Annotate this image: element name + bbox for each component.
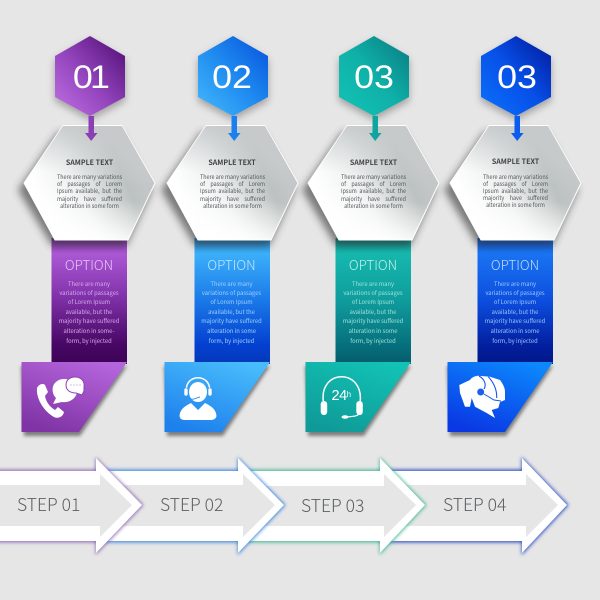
hexagon badge <box>481 36 551 120</box>
text block: There are many variations <box>341 172 406 181</box>
option text: available, but the <box>350 307 396 316</box>
fold with 24h headset icon <box>305 362 411 436</box>
icon: support agent <box>179 378 216 420</box>
icon: call centre team <box>459 376 505 418</box>
white hexagon <box>18 126 155 246</box>
text block <box>341 172 406 210</box>
text block: Ipsum available, but the <box>200 186 264 195</box>
text block: majority have suffered <box>341 194 406 203</box>
text block: There are many variations <box>57 172 122 181</box>
option text: form, by injected <box>209 336 254 345</box>
ribbon <box>52 238 127 364</box>
option text: alteration in some <box>349 326 397 335</box>
hexagon badge <box>55 36 125 120</box>
fold with phone icon <box>21 362 127 436</box>
option heading: OPTION <box>207 254 256 274</box>
text block: alteration in some form <box>344 201 403 210</box>
option text: There are many <box>210 278 253 288</box>
option text: majority have suffered <box>485 316 545 325</box>
option text: of Lorem Ipsum <box>352 297 394 306</box>
text block: alteration in some form <box>486 200 545 209</box>
option text: of Lorem Ipsum <box>494 297 536 306</box>
icon: phone and speech bubbles <box>37 377 84 418</box>
hexagon badge <box>198 36 268 120</box>
heading: sample text: SAMPLE TEXT <box>492 157 539 167</box>
option text: available, but the <box>208 307 255 316</box>
text block: majority have suffered <box>483 193 548 202</box>
text block: There are many variations <box>200 172 265 181</box>
option text: There are many <box>68 278 110 288</box>
arrow connector <box>228 116 240 141</box>
text block: alteration in some form <box>60 201 119 210</box>
hexagon badge <box>339 36 409 120</box>
option text: majority have suffered <box>201 316 262 325</box>
text block: Ipsum available, but the <box>341 186 406 195</box>
panel: column 1 <box>14 36 156 438</box>
option text <box>343 278 403 345</box>
option text: form, by injected <box>492 336 538 345</box>
option text: available, but the <box>492 307 538 316</box>
option text: There are many <box>352 278 394 288</box>
heading: sample text: SAMPLE TEXT <box>350 158 397 168</box>
number: 01 <box>72 59 107 95</box>
ribbon <box>194 238 270 364</box>
option text: There are many <box>494 278 536 288</box>
option heading: OPTION <box>349 254 397 274</box>
text block: Ipsum available, but the <box>57 186 122 195</box>
text block: majority have suffered <box>57 194 122 203</box>
number: 02 <box>212 59 251 95</box>
number: 03 <box>354 59 394 95</box>
panel: column 4 <box>440 36 582 438</box>
option heading: OPTION <box>65 254 113 274</box>
number: 03 <box>497 59 536 95</box>
text block: of passages of Lorem <box>200 179 264 188</box>
panel: column 2 <box>157 36 300 438</box>
fold with agent icon <box>164 362 270 436</box>
step 1 label: STEP 01 <box>17 492 80 517</box>
icon: 24h headset <box>321 377 363 419</box>
heading: sample text: SAMPLE TEXT <box>208 158 256 168</box>
option text: variations of passages <box>202 288 261 297</box>
option text: majority have suffered <box>59 316 119 325</box>
arrow connector <box>369 116 382 141</box>
icon: 24h headset: h <box>347 390 351 399</box>
fold with team icon <box>447 362 553 436</box>
step 2 label: STEP 02 <box>160 492 223 517</box>
option text: alteration in some <box>207 326 256 335</box>
text block: of passages of Lorem <box>483 179 548 188</box>
text block: Ipsum available, but the <box>483 186 548 195</box>
text block: of passages of Lorem <box>57 179 122 188</box>
arrow: step 2 <box>96 458 285 554</box>
text block: majority have suffered <box>200 194 264 203</box>
text block <box>200 172 265 210</box>
option text: variations of passages <box>343 288 403 297</box>
option text: alteration in some <box>491 326 539 335</box>
step 4 label: STEP 04 <box>443 492 506 517</box>
option text: alteration in some- <box>64 326 114 335</box>
option heading: OPTION <box>491 254 539 274</box>
option text: available, but the <box>66 307 112 316</box>
heading: sample text: SAMPLE TEXT <box>66 158 113 168</box>
arrow: step 4 <box>380 458 568 554</box>
text block: There are many variations <box>483 172 548 180</box>
icon: 24h headset: 24 <box>332 388 347 404</box>
option text: form, by injected <box>350 336 396 345</box>
option text: form, by injected <box>66 336 112 345</box>
text block: of passages of Lorem <box>341 179 406 188</box>
panel: step arrows <box>0 456 570 556</box>
arrow: step 3 <box>238 458 426 554</box>
option text: variations of passages <box>485 288 545 297</box>
text block: alteration in some form <box>203 201 261 210</box>
arrow connector <box>511 116 524 141</box>
ribbon <box>478 238 553 364</box>
text block <box>483 172 548 209</box>
arrow: step 1 <box>0 458 143 554</box>
white hexagon <box>444 126 581 246</box>
text block <box>57 172 122 210</box>
step 3 label: STEP 03 <box>301 493 364 518</box>
option text <box>201 278 262 345</box>
white hexagon <box>160 126 298 246</box>
panel: column 3 <box>298 36 440 438</box>
option text: of Lorem Ipsum <box>68 297 110 306</box>
option text: majority have suffered <box>343 316 403 325</box>
option text: of Lorem Ipsum <box>210 297 253 306</box>
ribbon <box>336 238 411 364</box>
option text: variations of passages <box>59 288 119 297</box>
white hexagon <box>302 126 439 246</box>
arrow connector <box>85 116 98 141</box>
option text <box>59 278 119 345</box>
option text <box>485 278 545 345</box>
